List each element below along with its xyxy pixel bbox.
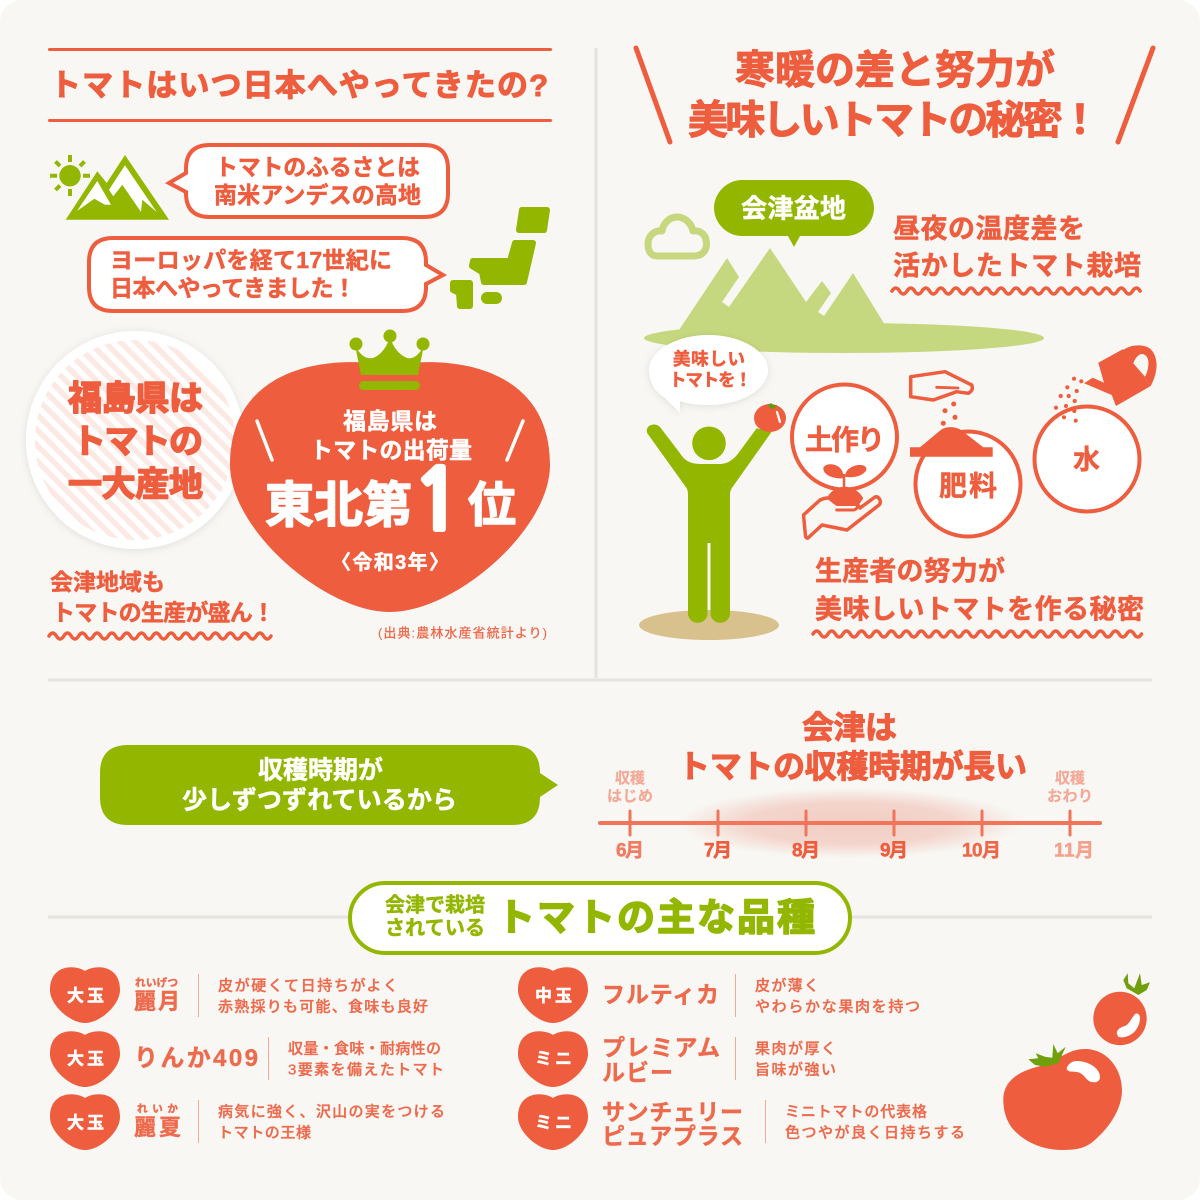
icon: watering can	[1084, 345, 1157, 406]
source note: (出典:農林水産省統計より)	[378, 626, 547, 640]
illustration: two tomatoes	[1003, 973, 1150, 1150]
variety: Frutica: フルティカ	[602, 982, 719, 1008]
variety: Sun Cherry Pure Plus: 色つやが良く日持ちする	[785, 1124, 966, 1142]
variety: Sun Cherry Pure Plus: ピュアプラス	[602, 1123, 743, 1149]
chart: harvest timeline: はじめ	[607, 788, 653, 805]
chart: harvest timeline: 11月	[1054, 840, 1094, 862]
icon: tomato in hand	[754, 403, 786, 432]
heading: secret of delicious tomatoes	[636, 48, 1153, 142]
heading: secret of delicious tomatoes: 寒暖の差と努力が	[735, 48, 1055, 92]
circle: water	[1034, 345, 1157, 512]
tomato heart: first in Tohoku: 1	[412, 459, 463, 543]
variety: Reika	[50, 1094, 446, 1150]
variety: Sun Cherry Pure Plus	[518, 1094, 966, 1150]
heading: main tomato varieties: されている	[385, 916, 485, 940]
circle: water: 水	[1073, 445, 1100, 475]
callout: via Europe to Japan	[89, 238, 443, 311]
tomato heart: first in Tohoku: トマトの出荷量	[310, 437, 472, 463]
variety: Premium Ruby: プレミアム	[602, 1034, 720, 1060]
callout: via Europe to Japan: ヨーロッパを経て17世紀に	[110, 247, 392, 273]
circle: Fukushima is a major producer	[26, 331, 244, 549]
text: day and night temperature difference: 活かしたトマト栽培	[893, 251, 1141, 281]
callout: via Europe to Japan: 日本へやってきました！	[110, 275, 356, 301]
illustration: mountains and basin	[644, 248, 1044, 353]
variety: Reigetsu: 麗月	[134, 989, 180, 1014]
tomato heart: first in Tohoku: 東北第	[265, 479, 412, 533]
variety: Rinka 409: 3要素を備えたトマト	[288, 1062, 445, 1078]
text: day and night temperature difference: 昼夜の温度差を	[893, 214, 1085, 244]
icon: map of Japan	[453, 210, 547, 306]
variety: Reika: 麗夏	[134, 1115, 181, 1140]
callout: Andes origin: トマトのふるさとは	[215, 154, 420, 180]
variety: Premium Ruby	[518, 1031, 837, 1087]
variety: Sun Cherry Pure Plus: ミニ	[535, 1114, 572, 1132]
variety: Reika: トマトの王様	[218, 1124, 312, 1142]
text: Aizu also produces tomatoes	[49, 569, 275, 639]
arrow callout: harvest period shifts	[100, 745, 558, 825]
variety: Frutica: やわらかな果肉を持つ	[755, 998, 921, 1016]
text: producers' effort: 生産者の努力が	[815, 556, 1005, 586]
label: Aizu basin	[714, 180, 874, 247]
variety: Premium Ruby: 果肉が厚く	[755, 1040, 837, 1058]
figure: farmer holding a tomato	[639, 403, 786, 640]
variety: Rinka 409: りんか409	[134, 1045, 258, 1072]
circle: fertilizer	[910, 372, 1020, 536]
variety: Reika: れいか	[137, 1103, 178, 1115]
arrow callout: harvest period shifts: 収穫時期が	[258, 756, 383, 784]
variety: Reigetsu: れいげつ	[135, 976, 178, 989]
variety: Reika: 大玉	[67, 1114, 104, 1132]
variety: Rinka 409: 大玉	[67, 1050, 104, 1068]
circle: fertilizer: 肥料	[939, 470, 997, 502]
chart: harvest timeline: 8月	[792, 840, 820, 862]
chart: harvest timeline: 10月	[962, 840, 1001, 862]
speech bubble: delicious tomatoes: 美味しい	[673, 349, 745, 369]
speech bubble: delicious tomatoes: トマトを！	[669, 370, 752, 390]
text: producers' effort	[813, 556, 1144, 637]
heading: main tomato varieties: トマトの主な品種	[497, 898, 815, 940]
variety: Frutica: 中玉	[535, 986, 572, 1006]
text: day and night temperature difference	[892, 214, 1141, 294]
circle: soil preparation	[792, 384, 897, 538]
icon: cloud	[648, 217, 706, 256]
text: Aizu also produces tomatoes: 会津地域も	[50, 569, 165, 595]
speech bubble: delicious tomatoes	[649, 335, 768, 413]
callout: Andes origin	[169, 145, 448, 217]
heading: main tomato varieties	[350, 883, 850, 953]
heading: long harvest period: 会津は	[802, 710, 897, 746]
chart: harvest timeline: 9月	[880, 840, 908, 862]
icon: crown	[350, 330, 430, 390]
tomato heart: first in Tohoku: 位	[468, 480, 516, 532]
variety: Sun Cherry Pure Plus: サンチェリー	[602, 1099, 743, 1125]
variety: Premium Ruby: ミニ	[535, 1050, 572, 1068]
variety: Reigetsu: 皮が硬くて日持ちがよく	[218, 976, 399, 994]
chart: harvest timeline: 6月	[616, 840, 644, 862]
variety: Rinka 409: 収量・食味・耐病性の	[288, 1040, 442, 1058]
variety: Premium Ruby: ルビー	[602, 1060, 673, 1086]
icon: sun and mountain	[50, 155, 169, 220]
heading: when tomatoes came to Japan	[48, 48, 552, 122]
variety: Frutica: 皮が薄く	[755, 976, 820, 994]
label: Aizu basin: 会津盆地	[741, 194, 846, 224]
variety: Reika: 病気に強く、沢山の実をつける	[218, 1104, 446, 1120]
heading: long harvest period: トマトの収穫時期が長い	[678, 748, 1027, 784]
circle: Fukushima is a major producer: 一大産地	[68, 466, 203, 504]
text: producers' effort: 美味しいトマトを作る秘密	[815, 594, 1144, 624]
text: Aizu also produces tomatoes: トマトの生産が盛ん！	[52, 600, 275, 626]
tomato heart: first in Tohoku: 〈令和3年〉	[331, 551, 449, 574]
chart: harvest timeline: 収穫	[615, 769, 645, 787]
heading: when tomatoes came to Japan: トマトはいつ日本へやってきたの?	[50, 68, 548, 103]
chart: harvest timeline	[600, 769, 1100, 862]
variety: Reigetsu: 大玉	[67, 986, 104, 1006]
arrow callout: harvest period shifts: 少しずつずれているから	[182, 786, 457, 814]
circle: soil preparation: 土作り	[805, 424, 885, 456]
chart: harvest timeline: 7月	[704, 840, 732, 862]
callout: Andes origin: 南米アンデスの高地	[214, 182, 421, 208]
circle: Fukushima is a major producer: 福島県は	[68, 380, 203, 418]
circle: Fukushima is a major producer: トマトの	[72, 423, 203, 461]
heading: secret of delicious tomatoes: 美味しいトマトの秘密！	[688, 98, 1100, 142]
variety: Reigetsu	[50, 967, 429, 1023]
variety: Sun Cherry Pure Plus: ミニトマトの代表格	[785, 1102, 928, 1120]
heading: main tomato varieties: 会津で栽培	[385, 894, 485, 916]
chart: harvest timeline: 収穫	[1055, 769, 1085, 787]
variety: Premium Ruby: 旨味が強い	[755, 1060, 837, 1078]
variety: Frutica	[518, 967, 921, 1023]
tomato heart: first in Tohoku	[230, 330, 550, 612]
variety: Reigetsu: 赤熟採りも可能、食味も良好	[218, 998, 429, 1016]
chart: harvest timeline: おわり	[1047, 788, 1093, 805]
variety: Rinka 409	[50, 1031, 445, 1087]
heading: long harvest period	[678, 710, 1027, 784]
tomato heart: first in Tohoku: 福島県は	[343, 408, 437, 434]
